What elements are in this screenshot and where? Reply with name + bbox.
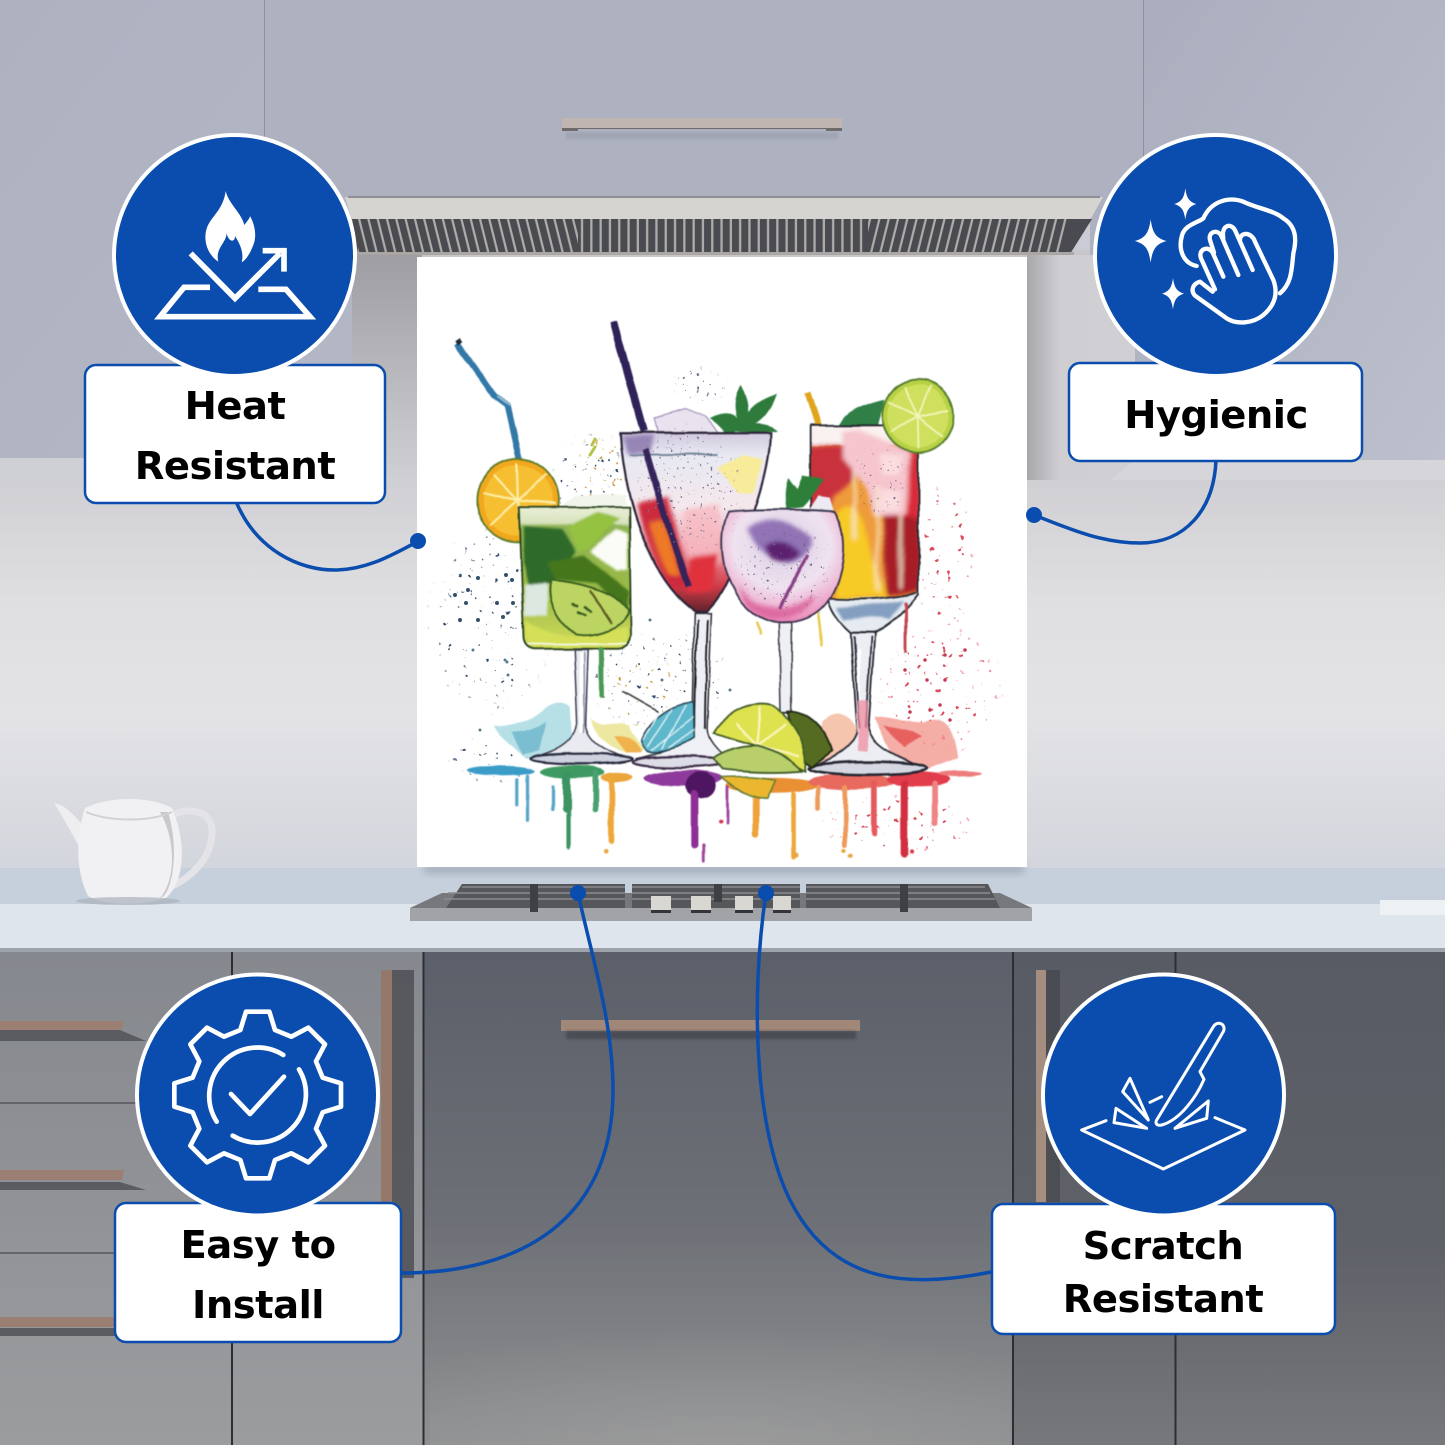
artwork panel: cocktails [417, 257, 1027, 874]
label text: Hygienic [1124, 393, 1308, 438]
label text: Easy to [180, 1223, 336, 1268]
lime half [713, 705, 805, 771]
bent blue straw [457, 344, 519, 460]
glass outline [811, 425, 919, 633]
icon badge [114, 135, 355, 376]
red drip [902, 602, 910, 653]
lime slice [882, 380, 954, 453]
top ice [561, 494, 627, 507]
left cabinet bevel [0, 458, 386, 478]
connector: easy to install [402, 885, 613, 1273]
worktop [0, 868, 1445, 953]
green drip [594, 649, 608, 694]
icon: gear with check mark [174, 1012, 341, 1178]
right upper cabinet [1135, 0, 1445, 460]
white panel [417, 257, 1027, 867]
shadow under hood right [1027, 255, 1137, 480]
glass 1: lime mojito tumbler [457, 341, 633, 764]
stem [635, 613, 727, 759]
ice [808, 496, 834, 512]
bowl base [829, 592, 918, 632]
dark lime [788, 711, 832, 767]
label text: Heat [185, 384, 285, 429]
lime wedge [549, 581, 629, 635]
lemon chunk [718, 454, 763, 494]
label text: Scratch [1083, 1224, 1243, 1269]
mint leaf [840, 399, 885, 425]
glass 2: pink and red coupe [613, 322, 777, 767]
tumbler contents [519, 505, 633, 649]
mint sprig [785, 476, 824, 509]
lime wedges [713, 705, 832, 799]
connector: scratch resistant [757, 885, 991, 1280]
speckles: dark [426, 434, 736, 783]
foot [632, 756, 726, 767]
foot [809, 762, 927, 775]
callout: heat resistant [85, 135, 385, 503]
teapot [54, 799, 212, 905]
icon: flame over reflecting arrow [160, 191, 310, 317]
painted cocktails, drawn in zoom coordinates [457, 322, 981, 862]
right cabinet bevel [1110, 460, 1445, 480]
callout: hygienic [1069, 135, 1362, 461]
icon: knife scratching a surface [1082, 1023, 1245, 1169]
label text: Install [192, 1283, 324, 1328]
waterline [629, 452, 719, 457]
blue splash [494, 702, 573, 759]
label text: Resistant [1063, 1277, 1263, 1322]
top cabinet handle [562, 118, 842, 139]
tumbler outline [519, 507, 631, 648]
label box [1069, 363, 1362, 461]
shadow under hood left [352, 255, 422, 480]
submerged straw [645, 449, 688, 587]
stem [811, 633, 922, 767]
panel shadow [424, 860, 1024, 874]
connector: hygienic [1026, 460, 1216, 543]
red splash [811, 713, 858, 765]
purple straw [613, 322, 644, 432]
bowl contents [719, 507, 847, 625]
lavender ice cube [654, 409, 718, 433]
glass 3: pink balloon glass [719, 476, 847, 713]
bowl contents [619, 431, 772, 614]
lime wedge front [713, 745, 801, 772]
drips [517, 773, 935, 862]
glass 4: tall red and orange drink [808, 380, 954, 775]
extractor hood [345, 196, 1103, 255]
wall tiles [0, 250, 1445, 875]
yellow splash [590, 718, 644, 753]
icon badge [1043, 974, 1284, 1216]
left upper cabinet [0, 0, 352, 458]
mint sprig [710, 385, 777, 462]
icon: wiping hand with sparkles [1135, 188, 1295, 322]
paint band [467, 765, 981, 798]
label box [992, 1204, 1335, 1334]
callout: easy to install [115, 974, 401, 1342]
label box [85, 365, 385, 503]
connector: heat resistant [235, 499, 426, 570]
orange slice [477, 459, 559, 542]
icon badge [137, 974, 378, 1216]
lemon below [720, 777, 776, 799]
stem [534, 649, 629, 757]
label box [115, 1203, 401, 1342]
bowl outline [620, 433, 770, 612]
drink contents [808, 424, 922, 638]
stem [779, 623, 792, 713]
drink umbrella [622, 692, 694, 753]
gas hob [410, 884, 1032, 921]
larger splatter dots [455, 439, 965, 730]
yellow straw [808, 393, 825, 445]
bowl outline [722, 510, 844, 623]
icon badge [1095, 135, 1336, 376]
yellow drips [756, 613, 822, 645]
speckles: gold [572, 434, 670, 726]
label text: Resistant [135, 444, 335, 489]
lower cabinets [0, 952, 1445, 1445]
speckles: red [822, 486, 1004, 856]
speckles inside glasses [634, 366, 907, 616]
foot [530, 754, 632, 764]
callout: scratch resistant [992, 974, 1335, 1334]
centre upper cabinet [265, 0, 1143, 197]
